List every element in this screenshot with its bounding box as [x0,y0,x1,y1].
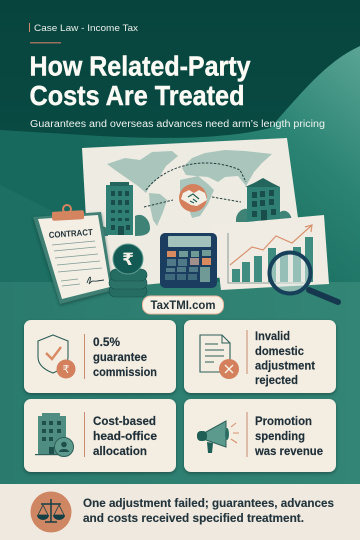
icon: scales of justice [30,492,72,532]
trend arrow [230,225,312,265]
icon: building with person [35,413,74,456]
card: guarantee commission: commission [93,365,157,379]
card: head-office allocation: allocation [93,444,147,458]
card: domestic adjustment: Invalid [255,329,290,343]
card: head-office allocation: head-office [93,429,157,443]
icon: right building [236,178,292,222]
card: promotion spending: was revenue [254,444,323,458]
conclusion strip: and costs received specified treatment. [83,511,304,525]
card: domestic adjustment [184,320,336,393]
title [30,50,251,111]
card: promotion spending: spending [255,429,305,443]
website pill [142,296,224,314]
background: left wall facet [0,185,60,282]
icon: megaphone [197,421,239,453]
bars [232,237,313,282]
card: promotion spending: Promotion [255,414,312,428]
dashed arrows [144,163,246,207]
conclusion strip [0,484,360,540]
icon: contract clipboard: CONTRACT [48,227,94,240]
card: head-office allocation [24,399,176,472]
icon: rupee coin stack: ₹ [122,250,134,270]
icon: rupee coin stack [109,244,147,297]
website pill: TaxTMI.com [150,298,216,312]
illustration: world map panel [82,138,300,290]
icon: shield with rupee: ₹ [62,363,70,376]
card: head-office allocation: Cost-based [93,414,156,428]
icon: calculator [160,233,217,288]
title: How Related-Party [30,50,251,82]
card: guarantee commission [24,320,176,393]
card: promotion spending [184,399,336,472]
icon: magnifying glass [270,252,338,302]
subtitle: Guarantees and overseas advances need arm’s length pricing [30,119,325,130]
section label [29,23,138,44]
card: guarantee commission: guarantee [93,350,147,364]
title: Costs Are Treated [30,80,244,111]
section label: Case Law - Income Tax [34,23,138,34]
card: domestic adjustment: adjustment [255,358,315,372]
map continents [107,150,272,226]
illustration: chart panel [213,215,329,290]
icon: rejected document [200,335,239,379]
background: dark green header [0,0,360,300]
card: domestic adjustment: domestic [255,344,304,358]
background: light hill on the right [0,46,360,300]
conclusion strip: One adjustment failed; guarantees, advances [83,496,334,510]
icon: contract clipboard [33,205,113,304]
card: guarantee commission: 0.5% [93,335,120,349]
background: floor and card area [0,282,360,486]
icon: shield with rupee [38,335,76,378]
icon: handshake [179,184,207,212]
card: domestic adjustment: rejected [255,373,298,387]
icon: left building [97,182,150,236]
